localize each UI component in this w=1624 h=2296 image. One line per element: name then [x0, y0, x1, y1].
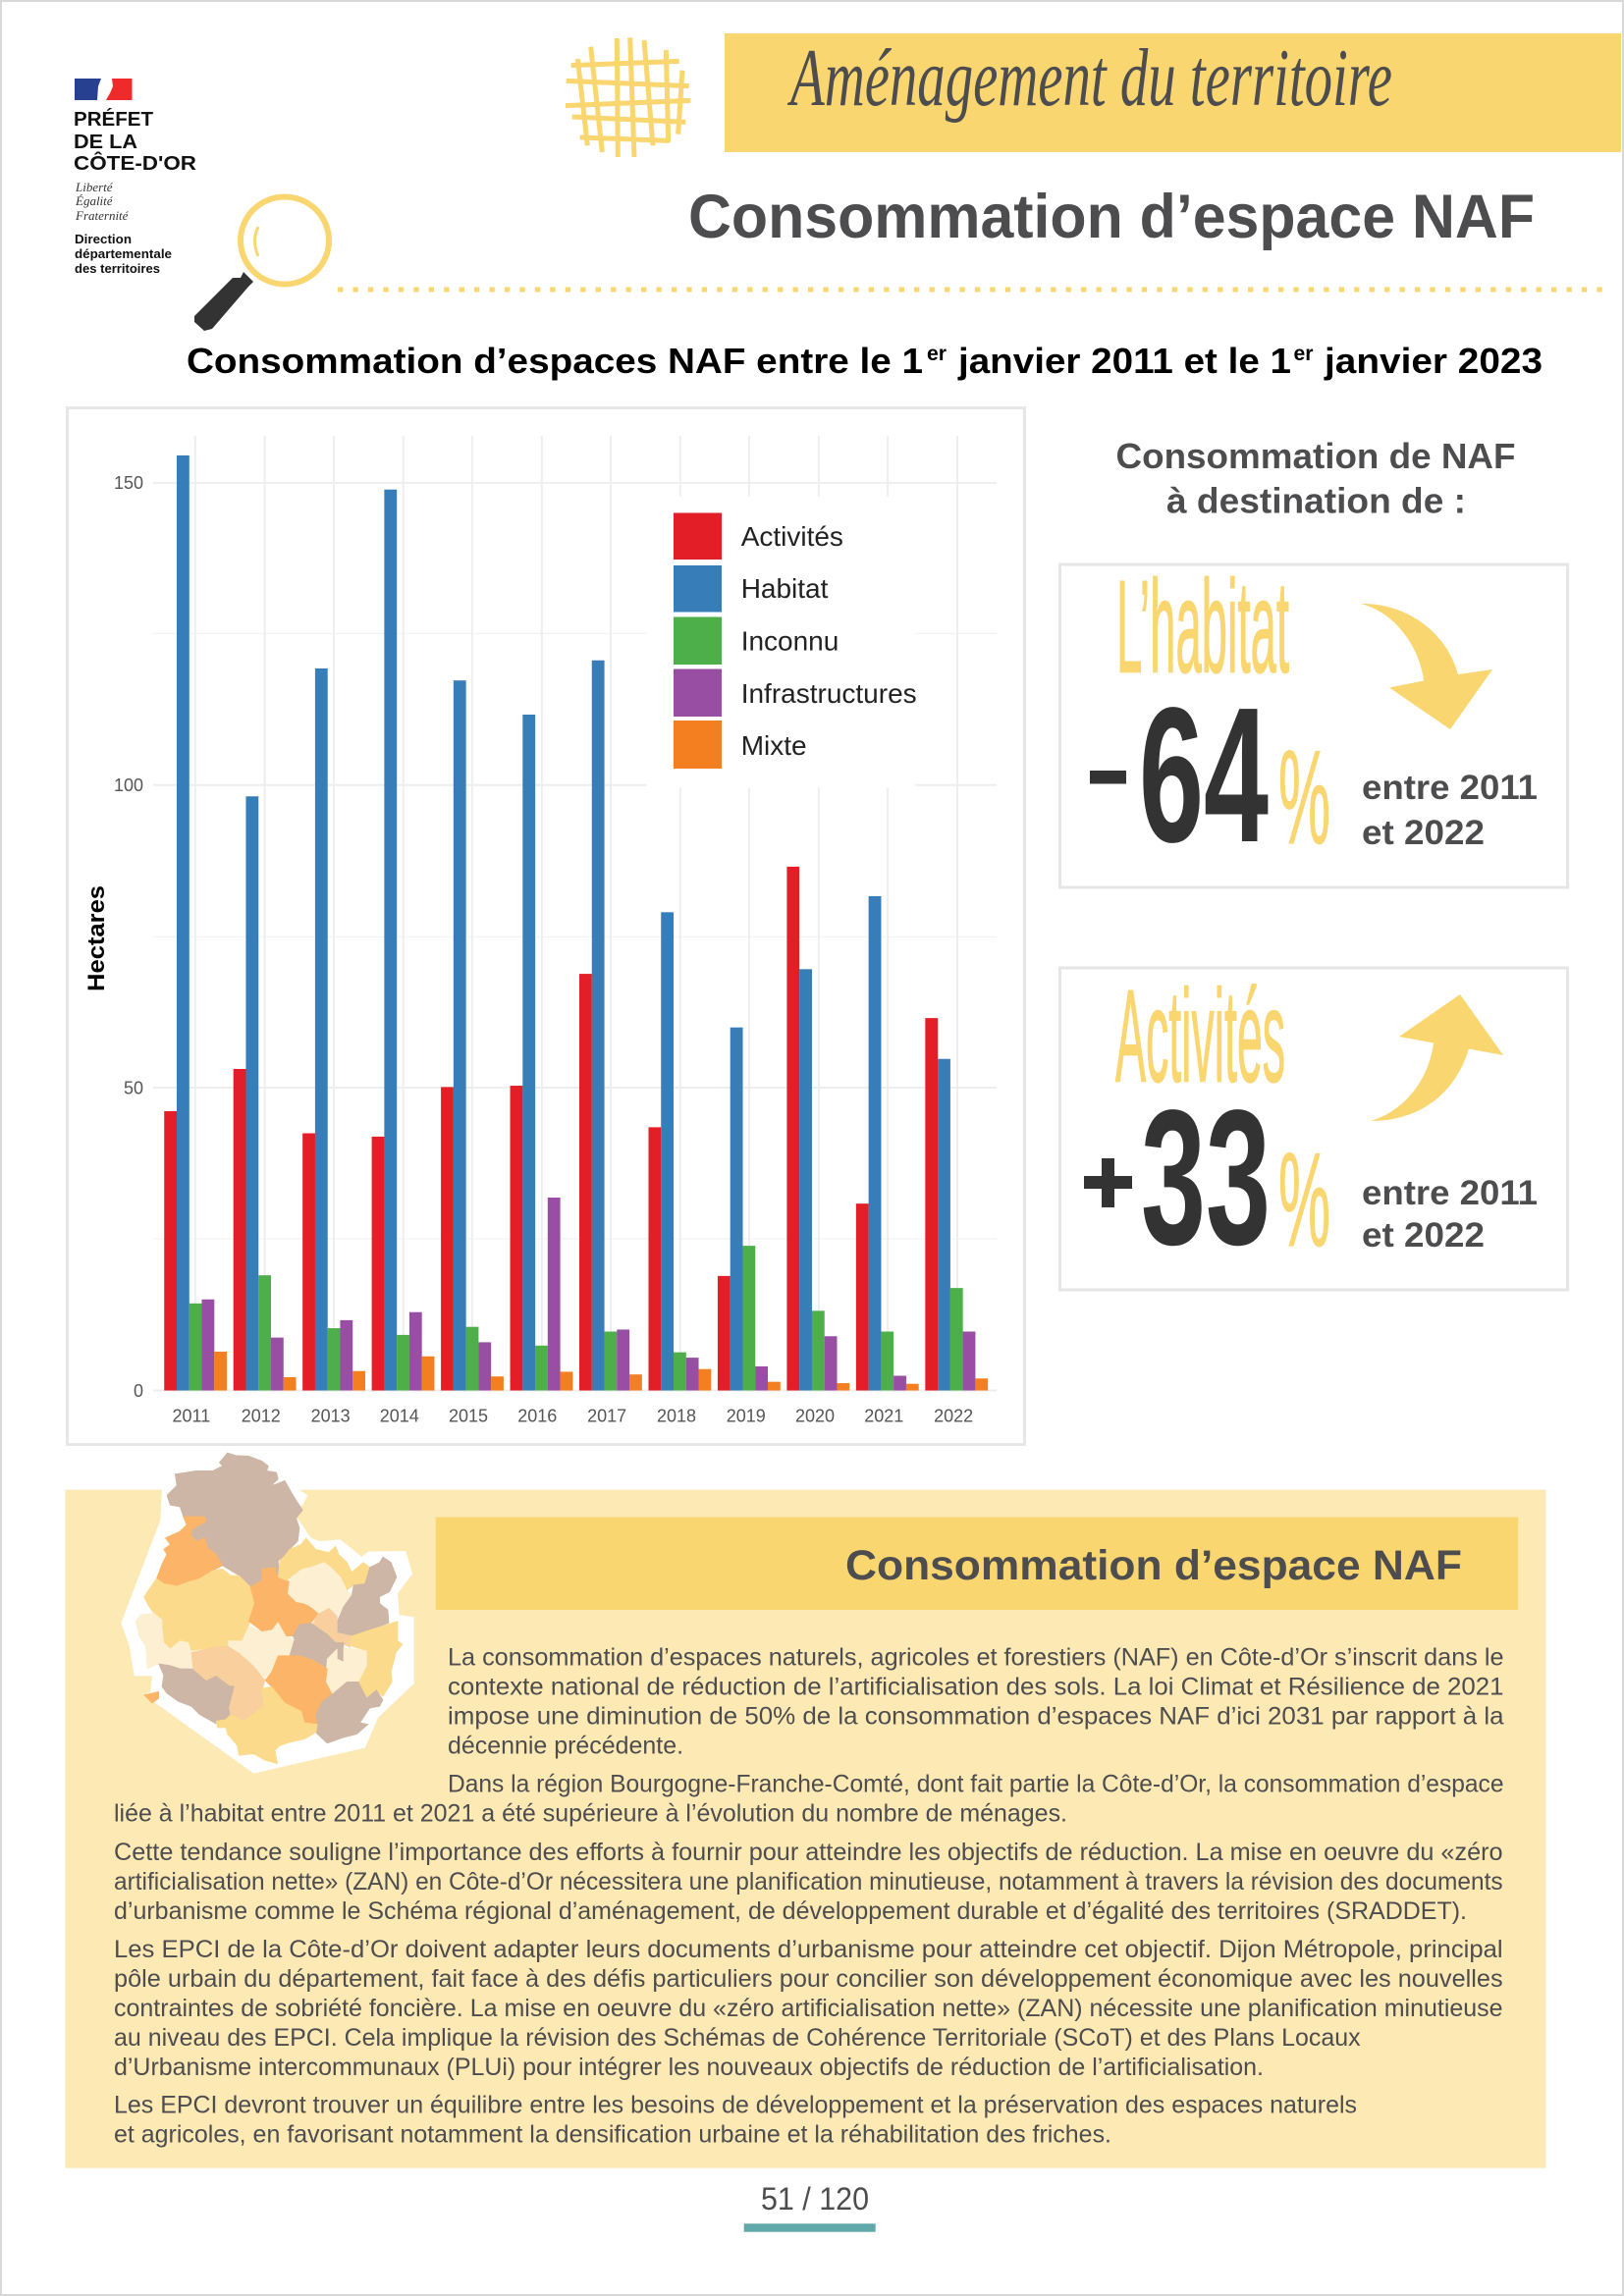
prefecture name — [74, 108, 196, 175]
bars 2020 — [786, 867, 849, 1391]
subtitle: Consommation d’espaces NAF entre le 1 — [187, 341, 923, 381]
value: -64: 64 — [1139, 667, 1269, 882]
prefecture name: PRÉFET — [74, 108, 153, 131]
x axis labels: 2016 — [517, 1406, 557, 1425]
page number: 51 / 120 — [761, 2181, 869, 2216]
bars 2018 — [648, 912, 711, 1391]
period caption — [1362, 769, 1538, 852]
x axis labels: 2020 — [795, 1406, 835, 1425]
paragraph 3: Cette tendance souligne l’importance des efforts à fournir pour atteindre les objectifs de réduction. La mise en oeuvre du «zéro — [114, 1839, 1503, 1866]
paragraph 3: d’urbanisme comme le Schéma régional d’aménagement, de développement durable et d’égalité des territoires (SRADDET). — [114, 1897, 1467, 1925]
paragraph 2: liée à l’habitat entre 2011 et 2021 a été supérieure à l’évolution du nombre de ménages. — [114, 1800, 1067, 1828]
paragraph 1: décennie précédente. — [448, 1733, 683, 1760]
motto: Liberté — [75, 180, 114, 194]
logo: Préfet de la Côte-d'Or — [74, 79, 196, 276]
panel: activités +33%: Activités — [1115, 964, 1285, 1109]
bars 2017 — [579, 661, 642, 1391]
paragraph 5 — [114, 2092, 1357, 2149]
subtitle — [187, 341, 1543, 381]
heading: consommation de NAF à destination de — [1115, 436, 1516, 520]
motto: Fraternité — [75, 208, 130, 223]
prefecture name: DE LA — [74, 131, 137, 153]
icon: French flag — [75, 79, 132, 100]
x axis labels: 2015 — [449, 1406, 488, 1425]
bars 2012 — [234, 796, 297, 1391]
x axis labels: 2021 — [864, 1406, 903, 1425]
arrow: down — [1361, 604, 1492, 729]
panel: habitat -64%: L’habitat — [1116, 554, 1289, 701]
panel: activités +33% — [1060, 964, 1567, 1290]
heading: consommation de NAF à destination de: Consommation de NAF — [1115, 436, 1516, 476]
bars 2021 — [856, 896, 919, 1391]
panel: activités +33%: % — [1278, 1125, 1330, 1274]
heading bar — [436, 1518, 1518, 1610]
paragraph 4: Les EPCI de la Côte-d’Or doivent adapter leurs documents d’urbanisme pour atteindre cet objectif. Dijon Métropole, principal — [114, 1936, 1503, 1963]
paragraph 4: d’Urbanisme intercommunaux (PLUi) pour intégrer les nouveaux objectifs de réduction de l’artificialisation. — [114, 2054, 1264, 2081]
heading bar: Consommation d’espace NAF — [845, 1542, 1462, 1589]
paragraph 2: Dans la région Bourgogne-Franche-Comté, dont fait partie la Côte-d’Or, la consommation d’espace — [448, 1771, 1504, 1798]
legend background and swatches: Mixte — [741, 730, 807, 761]
paragraph 1: contexte national de réduction de l’artificialisation des sols. La loi Climat et Résilience de 2021 — [448, 1674, 1504, 1701]
icon: magnifying glass — [194, 196, 329, 331]
paragraph 1: impose une diminution de 50% de la consommation d’espaces NAF d’ici 2031 par rapport à la — [448, 1703, 1504, 1731]
paragraph 3: artificialisation nette» (ZAN) en Côte-d’Or nécessitera une planification minutieuse, notamment à travers la révision des documents — [114, 1868, 1503, 1896]
direction name: départementale — [75, 247, 172, 261]
subtitle: janvier 2011 et le 1 — [957, 341, 1291, 381]
x axis labels: 2014 — [380, 1406, 419, 1425]
legend background and swatches: Habitat — [741, 573, 829, 604]
x axis labels — [173, 1406, 973, 1425]
panel: habitat -64% — [1060, 554, 1567, 887]
period caption: entre 2011 — [1362, 1174, 1538, 1212]
paragraph 4: au niveau des EPCI. Cela implique la révision des Schémas de Cohérence Territoriale (SCoT) et des Plans Locaux — [114, 2024, 1361, 2052]
direction name: Direction — [75, 233, 132, 246]
arrow: up — [1371, 994, 1503, 1121]
value: +33: 33 — [1141, 1070, 1271, 1285]
period caption: et 2022 — [1362, 814, 1485, 852]
x axis labels: 2019 — [727, 1406, 766, 1425]
paragraph 4 — [114, 1936, 1503, 2081]
paragraph 4: contraintes de sobriété foncière. La mise en oeuvre du «zéro artificialisation nette» (ZAN) nécessite une planification minutieuse — [114, 1995, 1503, 2022]
paragraph 3 — [114, 1839, 1503, 1925]
bars — [164, 455, 988, 1391]
subtitle: er — [927, 343, 947, 365]
bars 2019 — [718, 1028, 781, 1391]
panel: explanatory text — [65, 1453, 1545, 2168]
panel: bar chart — [67, 408, 1025, 1445]
paragraph 1 — [448, 1644, 1504, 1760]
legend background and swatches: Infrastructures — [741, 678, 917, 709]
main title: Consommation d’espace NAF — [688, 183, 1535, 251]
y axis labels: 100 — [114, 775, 143, 795]
bars 2014 — [372, 490, 434, 1391]
x axis labels: 2012 — [242, 1406, 281, 1425]
paragraph 5: Les EPCI devront trouver un équilibre entre les besoins de développement et la préservation des espaces naturels — [114, 2092, 1357, 2119]
paragraph 1: La consommation d’espaces naturels, agricoles et forestiers (NAF) en Côte-d’Or s’inscrit dans le — [448, 1644, 1504, 1672]
y axis labels: 0 — [134, 1381, 143, 1401]
heading: consommation de NAF à destination de: à destination de : — [1166, 481, 1466, 520]
period caption — [1362, 1174, 1538, 1255]
y axis labels — [114, 473, 143, 1401]
icon: woven grid — [566, 37, 690, 157]
paragraph 5: et agricoles, en favorisant notamment la densification urbaine et la réhabilitation des friches. — [114, 2121, 1111, 2149]
direction name — [75, 233, 172, 276]
legend background and swatches — [647, 497, 917, 787]
y axis title: Hectares — [83, 885, 110, 991]
x axis labels: 2011 — [173, 1406, 210, 1425]
subtitle: janvier 2023 — [1324, 341, 1543, 381]
bars 2011 — [164, 455, 227, 1391]
x axis labels: 2013 — [311, 1406, 351, 1425]
period caption: entre 2011 — [1362, 769, 1538, 807]
panel: habitat -64%: % — [1278, 722, 1330, 872]
map: Côte-d'Or EPCI — [121, 1453, 414, 1774]
bars 2013 — [302, 668, 365, 1391]
x axis labels: 2022 — [934, 1406, 973, 1425]
subtitle: er — [1294, 343, 1314, 365]
value: +33 — [1084, 1070, 1271, 1285]
prefecture name: CÔTE-D'OR — [74, 151, 196, 175]
paragraph 2 — [114, 1771, 1504, 1828]
direction name: des territoires — [75, 262, 160, 276]
y axis labels: 150 — [114, 473, 143, 493]
motto — [75, 180, 130, 223]
page number — [744, 2181, 876, 2232]
period caption: et 2022 — [1362, 1216, 1485, 1255]
bars 2016 — [511, 715, 572, 1391]
x axis labels: 2018 — [657, 1406, 696, 1425]
bars 2015 — [441, 680, 504, 1391]
y axis labels: 50 — [124, 1078, 143, 1097]
x axis labels: 2017 — [587, 1406, 626, 1425]
paragraph 4: pôle urbain du département, fait face à des défis particuliers pour concilier son développement économique avec les nouvelles — [114, 1965, 1503, 1993]
value: -64 — [1090, 667, 1269, 882]
bars 2022 — [925, 1018, 988, 1391]
legend background and swatches: Inconnu — [741, 626, 839, 656]
motto: Égalité — [75, 193, 114, 208]
legend background and swatches: Activités — [741, 521, 843, 552]
